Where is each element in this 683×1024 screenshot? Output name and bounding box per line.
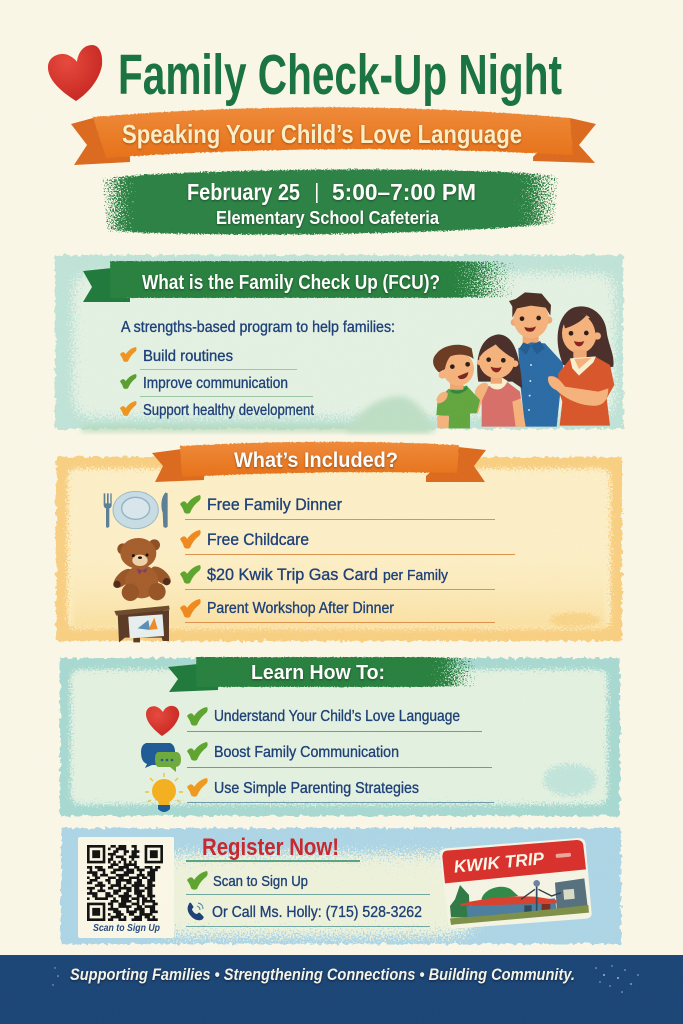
- list: program goals: Build routines: [143, 348, 233, 365]
- intro text: A strengths-based program to help families:: [121, 319, 395, 336]
- icon: phone: [188, 903, 204, 920]
- call line: Or Call Ms. Holly: (715) 528-3262: [212, 904, 422, 921]
- panel: register now: [61, 828, 621, 944]
- icon: heart: [146, 706, 179, 736]
- dad: [509, 292, 563, 427]
- panel: what is the FCU: [55, 255, 623, 432]
- list: program goals: [120, 347, 314, 419]
- panel: what's included: [56, 442, 622, 642]
- QR caption: Scan to Sign Up: [93, 922, 160, 934]
- green ribbon heading: [83, 261, 515, 302]
- heading: register now: Register Now!: [202, 834, 339, 861]
- list: skills: Use Simple Parenting Strategies: [214, 780, 419, 797]
- illustration: family of four: [433, 292, 614, 428]
- date and time: [187, 179, 476, 205]
- QR code card: [78, 837, 174, 938]
- QR code: [87, 845, 163, 921]
- list: included items: Free Childcare: [207, 530, 309, 549]
- list: included items: Parent Workshop After Dinner: [207, 600, 394, 617]
- icon: speech bubbles: [141, 743, 181, 772]
- green ribbon heading: [168, 657, 476, 692]
- icon: teddy bear: [110, 538, 174, 601]
- girl: [475, 334, 526, 427]
- list: program goals: Improve communication: [143, 375, 288, 392]
- heading text: What’s Included?: [234, 449, 398, 472]
- heading text: What is the Family Check Up (FCU)?: [142, 272, 440, 294]
- list: skills: Boost Family Communication: [214, 744, 399, 761]
- list: included items: Free Family Dinner: [207, 495, 342, 514]
- list: included items: per Family: [383, 567, 448, 584]
- icon: Kwik Trip gas card: [440, 838, 592, 929]
- main orange ribbon with subtitle: [71, 107, 596, 165]
- list: included items: $20 Kwik Trip Gas Card: [207, 565, 378, 584]
- sign up line: [187, 871, 308, 890]
- heading text: Learn How To:: [251, 662, 385, 684]
- panel: learn how to: [60, 657, 620, 816]
- sign up line: Scan to Sign Up: [213, 873, 308, 890]
- mom: [548, 306, 614, 426]
- list: skills: Understand Your Child’s Love Language: [214, 708, 460, 725]
- card brand name: KWIK TRIP: [453, 848, 545, 877]
- footer tagline: Supporting Families • Strengthening Connections • Building Community.: [70, 965, 575, 984]
- subtitle: Speaking Your Child’s Love Language: [122, 119, 522, 149]
- date and time: February 25: [187, 179, 300, 205]
- footer speckles: [52, 965, 639, 993]
- icon: light bulb: [145, 773, 183, 812]
- location: Elementary School Cafeteria: [216, 208, 440, 228]
- footer band: [0, 955, 683, 1024]
- icon: plate and cutlery: [104, 491, 168, 529]
- date and time: 5:00–7:00 PM: [332, 179, 476, 205]
- list: program goals: Support healthy development: [143, 402, 314, 419]
- boy: [433, 345, 480, 428]
- icon: framed workshop board: [114, 606, 170, 642]
- green brush banner with date and place: [100, 169, 560, 235]
- orange ribbon heading: [152, 442, 486, 482]
- list: included items: [180, 495, 515, 623]
- icon: large red heart: [48, 45, 102, 101]
- list: skills: [187, 707, 494, 803]
